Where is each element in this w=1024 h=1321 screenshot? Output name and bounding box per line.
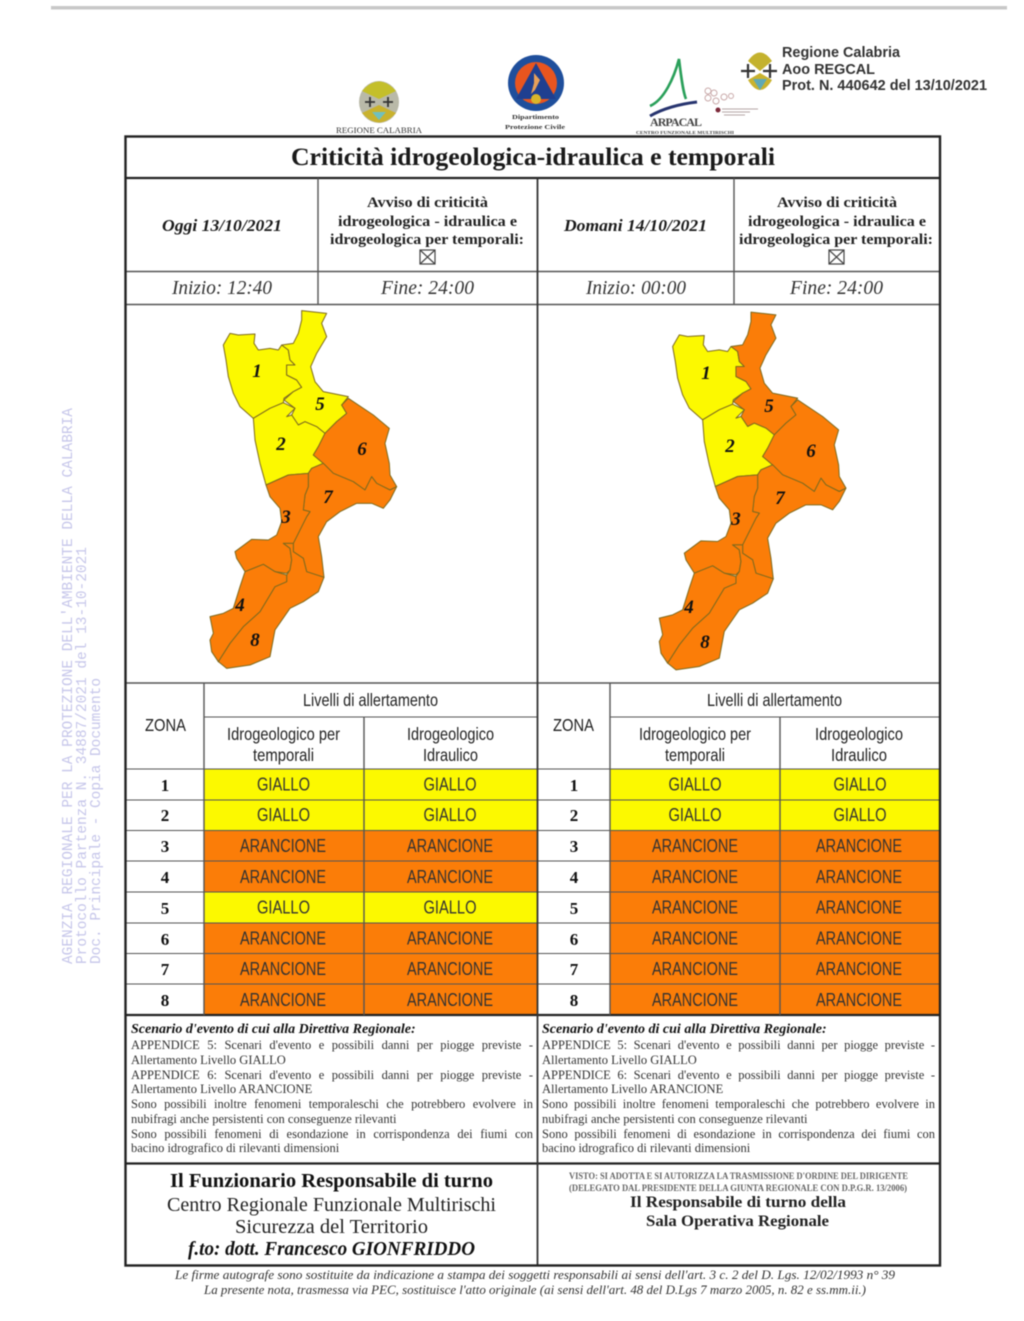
protocol text: Regione Calabria bbox=[782, 45, 901, 61]
map labels: tomorrow: 6 bbox=[806, 441, 816, 462]
logo: protocol stamp crest bbox=[741, 52, 777, 90]
header: today: Oggi 13/10/2021 bbox=[162, 216, 282, 235]
table headings: right: Idraulico bbox=[831, 745, 887, 765]
protocol text: Prot. N. 440642 del 13/10/2021 bbox=[782, 78, 987, 94]
signature: left bbox=[167, 1170, 496, 1260]
footer note bbox=[174, 1267, 896, 1297]
alert levels: left table: ARANCIONE bbox=[240, 928, 326, 948]
zone numbers: 5 bbox=[161, 899, 169, 918]
table headings: left: Idrogeologico per bbox=[227, 724, 340, 744]
scenario text: left: Sono possibili fenomeni di esondazione in corrispondenza dei fiumi con bbox=[131, 1126, 533, 1140]
logo: Dipartimento Protezione Civile: Protezione Civile bbox=[505, 124, 565, 131]
signature: left: f.to: dott. Francesco GIONFRIDDO bbox=[188, 1238, 475, 1260]
signature: right: (DELEGATO DAL PRESIDENTE DELLA GIUNTA REGIONALE CON D.P.G.R. 13/2006) bbox=[569, 1183, 907, 1194]
table headings: right: temporali bbox=[665, 745, 725, 765]
zone numbers: 2 bbox=[570, 806, 578, 825]
header: tomorrow: idrogeologica - idraulica e bbox=[748, 214, 927, 230]
zone numbers: 6 bbox=[161, 930, 169, 949]
header: today: Fine: 24:00 bbox=[380, 278, 474, 299]
logo: ARPACAL: ARPACAL bbox=[650, 115, 702, 129]
alert levels: left table: ARANCIONE bbox=[407, 990, 493, 1010]
signature: right: Il Responsabile di turno della bbox=[630, 1194, 846, 1211]
checkbox: tomorrow bbox=[829, 250, 844, 264]
map labels: today bbox=[234, 361, 367, 651]
scenario text: right: APPENDICE 6: Scenari d'evento e possibili danni per piogge previste - bbox=[542, 1068, 935, 1082]
map labels: tomorrow: 1 bbox=[701, 363, 711, 384]
map labels: tomorrow: 3 bbox=[730, 509, 741, 530]
alert levels: left table: ARANCIONE bbox=[240, 990, 326, 1010]
alert levels: left table: GIALLO bbox=[424, 805, 476, 825]
signature: left: Il Funzionario Responsabile di turno bbox=[170, 1170, 493, 1192]
signature: right bbox=[569, 1172, 908, 1230]
protocol text: Aoo REGCAL bbox=[782, 62, 875, 78]
alert levels: right table: GIALLO bbox=[834, 774, 886, 794]
table headings: left: temporali bbox=[253, 745, 314, 765]
map labels: today: 1 bbox=[252, 361, 262, 382]
alert level cells: right table bbox=[610, 769, 940, 1015]
alert levels: left table: ARANCIONE bbox=[407, 959, 493, 979]
scenario text: right bbox=[542, 1023, 935, 1161]
zone numbers bbox=[161, 776, 579, 1010]
map labels: tomorrow: 2 bbox=[724, 436, 735, 457]
table headings: right: Idrogeologico bbox=[815, 724, 903, 744]
alert levels: right table: ARANCIONE bbox=[816, 836, 902, 856]
logo: ARPACAL: CENTRO FUNZIONALE MULTIRISCHI bbox=[636, 130, 734, 135]
scenario text: right: Sono possibili inoltre fenomeni temporaleschi che potrebbero evolvere in bbox=[542, 1097, 935, 1111]
header: tomorrow: idrogeologica per temporali: bbox=[739, 232, 933, 248]
header: today: idrogeologica - idraulica e bbox=[338, 214, 518, 230]
alert levels: left table: ARANCIONE bbox=[240, 867, 326, 887]
logo: Regione Calabria: REGIONE CALABRIA bbox=[336, 126, 422, 135]
alert levels: right table: ARANCIONE bbox=[652, 928, 738, 948]
protocol text bbox=[782, 45, 987, 94]
alert levels: left table: GIALLO bbox=[257, 898, 310, 918]
logo: ARPACAL bbox=[636, 59, 758, 135]
zone numbers: 1 bbox=[570, 776, 578, 795]
zone numbers: 7 bbox=[570, 960, 579, 979]
map labels: tomorrow: 8 bbox=[700, 632, 710, 653]
alert levels: right table: GIALLO bbox=[668, 774, 722, 794]
alert levels: right table: ARANCIONE bbox=[652, 898, 738, 918]
map labels: tomorrow: 7 bbox=[775, 488, 786, 509]
side watermark: protocol stamp: Doc. Principale - Copia Documento bbox=[89, 678, 105, 964]
side watermark: protocol stamp: Protocollo Partenza N. 34887/2021 del 13-10-2021 bbox=[75, 547, 91, 964]
map labels: tomorrow: 5 bbox=[764, 396, 774, 417]
zone numbers: 3 bbox=[161, 837, 169, 856]
alert levels: left table: ARANCIONE bbox=[240, 836, 326, 856]
map labels: tomorrow bbox=[683, 363, 816, 653]
scenario text: right: Allertamento Livello ARANCIONE bbox=[542, 1082, 723, 1096]
side watermark: protocol stamp: AGENZIA REGIONALE PER LA PROTEZIONE DELL'AMBIENTE DELLA CALABRIA bbox=[61, 408, 77, 964]
header: today bbox=[162, 195, 524, 299]
checkbox: today bbox=[420, 250, 435, 264]
table headings: left: Idrogeologico bbox=[407, 724, 494, 744]
zone numbers: 7 bbox=[161, 960, 170, 979]
map labels: today: 2 bbox=[275, 434, 286, 455]
table grid bbox=[125, 136, 940, 1266]
zone numbers: 1 bbox=[161, 776, 169, 795]
map: Calabria tomorrow bbox=[659, 312, 846, 670]
map labels: today: 4 bbox=[234, 595, 245, 616]
table headings: left bbox=[145, 690, 494, 765]
scenario text: left: APPENDICE 5: Scenari d'evento e possibili danni per piogge previste - bbox=[131, 1038, 533, 1052]
map labels: today: 6 bbox=[357, 439, 367, 460]
alert levels: left table bbox=[240, 774, 493, 1010]
scenario text: right: APPENDICE 5: Scenari d'evento e possibili danni per piogge previste - bbox=[542, 1038, 935, 1052]
table headings: right: Livelli di allertamento bbox=[707, 690, 842, 710]
header: tomorrow: Domani 14/10/2021 bbox=[563, 216, 707, 235]
alert levels: right table: GIALLO bbox=[668, 805, 722, 825]
scenario text: left bbox=[131, 1023, 533, 1161]
alert levels: left table: ARANCIONE bbox=[407, 928, 493, 948]
signature: right: VISTO: SI ADOTTA E SI AUTORIZZA LA TRASMISSIONE D'ORDINE DEL DIRIGENTE bbox=[569, 1172, 908, 1182]
zone numbers: 6 bbox=[570, 930, 578, 949]
alert levels: left table: ARANCIONE bbox=[407, 867, 493, 887]
signature: right: Sala Operativa Regionale bbox=[646, 1213, 829, 1230]
title: Criticità idrogeologica-idraulica e temporali bbox=[291, 144, 775, 171]
alert levels: right table: ARANCIONE bbox=[816, 990, 902, 1010]
header: today: Avviso di criticità bbox=[367, 195, 489, 211]
alert levels: right table: ARANCIONE bbox=[816, 959, 902, 979]
table headings: right: ZONA bbox=[553, 715, 594, 735]
scenario text: right: bacino idrografico di rilevanti dimensioni bbox=[542, 1141, 750, 1155]
scenario text: left: bacino idrografico di rilevanti dimensioni bbox=[131, 1141, 339, 1155]
header: tomorrow: Inizio: 00:00 bbox=[585, 278, 686, 299]
scenario text: left: APPENDICE 6: Scenari d'evento e possibili danni per piogge previste - bbox=[131, 1068, 533, 1082]
alert levels: right table: GIALLO bbox=[834, 805, 886, 825]
header: tomorrow: Avviso di criticità bbox=[777, 195, 898, 211]
logo: Dipartimento Protezione Civile bbox=[505, 55, 565, 131]
map labels: today: 8 bbox=[250, 630, 260, 651]
header: tomorrow bbox=[563, 195, 933, 299]
map labels: today: 7 bbox=[323, 487, 334, 508]
map: Calabria today bbox=[210, 311, 397, 668]
alert levels: left table: ARANCIONE bbox=[407, 836, 493, 856]
footer note: La presente nota, trasmessa via PEC, sostituisce l'atto originale (ai sensi dell'art. 48 del D.Lgs 7 marzo 2005, n. 82 e ss.mm.ii.) bbox=[203, 1282, 866, 1297]
alert levels: left table: ARANCIONE bbox=[240, 959, 326, 979]
scenario text: right: nubifragi anche persistenti con conseguenze rilevanti bbox=[542, 1112, 808, 1126]
table headings: left: ZONA bbox=[145, 715, 186, 735]
zone numbers: 8 bbox=[161, 991, 169, 1010]
alert levels: right table: ARANCIONE bbox=[652, 959, 738, 979]
map labels: today: 5 bbox=[315, 394, 325, 415]
zone numbers: 5 bbox=[570, 899, 578, 918]
zone numbers: 4 bbox=[570, 868, 579, 887]
alert levels: right table: ARANCIONE bbox=[816, 898, 902, 918]
signature: left: Sicurezza del Territorio bbox=[235, 1216, 428, 1238]
alert levels: right table: ARANCIONE bbox=[652, 836, 738, 856]
map labels: tomorrow: 4 bbox=[683, 597, 694, 618]
alert levels: right table: ARANCIONE bbox=[816, 867, 902, 887]
alert levels: right table bbox=[652, 774, 902, 1010]
side watermark: protocol stamp bbox=[61, 408, 105, 964]
alert levels: left table: GIALLO bbox=[424, 774, 476, 794]
scenario text: left: nubifragi anche persistenti con conseguenze rilevanti bbox=[131, 1112, 397, 1126]
zone numbers: 4 bbox=[161, 868, 170, 887]
table headings: left: Idraulico bbox=[423, 745, 478, 765]
scenario text: left: Sono possibili inoltre fenomeni temporaleschi che potrebbero evolvere in bbox=[131, 1097, 533, 1111]
map labels: today: 3 bbox=[280, 507, 291, 528]
alert level cells: left table bbox=[204, 769, 537, 1015]
scenario text: right: Allertamento Livello GIALLO bbox=[542, 1053, 697, 1067]
logo: Dipartimento Protezione Civile: Dipartimento bbox=[512, 114, 559, 121]
zone numbers: 3 bbox=[570, 837, 578, 856]
table headings: right: Idrogeologico per bbox=[639, 724, 751, 744]
alert levels: left table: GIALLO bbox=[257, 805, 310, 825]
alert levels: left table: GIALLO bbox=[424, 898, 476, 918]
header: today: Inizio: 12:40 bbox=[171, 278, 272, 299]
alert levels: left table: GIALLO bbox=[257, 774, 310, 794]
scenario text: right: Sono possibili fenomeni di esondazione in corrispondenza dei fiumi con bbox=[542, 1126, 935, 1140]
zone numbers: 8 bbox=[570, 991, 578, 1010]
alert levels: right table: ARANCIONE bbox=[652, 867, 738, 887]
logo: Regione Calabria bbox=[336, 81, 422, 135]
header: tomorrow: Fine: 24:00 bbox=[789, 278, 883, 299]
alert levels: right table: ARANCIONE bbox=[652, 990, 738, 1010]
zone numbers: 2 bbox=[161, 806, 169, 825]
footer note: Le firme autografe sono sostituite da indicazione a stampa dei soggetti responsabili ai sensi dell'art. 3 c. 2 del D. Lgs. 12/02/1993 n° 39 bbox=[174, 1267, 896, 1282]
signature: left: Centro Regionale Funzionale Multirischi bbox=[167, 1194, 496, 1216]
scenario text: left: Allertamento Livello ARANCIONE bbox=[131, 1082, 312, 1096]
alert levels: right table: ARANCIONE bbox=[816, 928, 902, 948]
scenario text: left: Allertamento Livello GIALLO bbox=[131, 1053, 286, 1067]
table headings: left: Livelli di allertamento bbox=[303, 690, 438, 710]
table headings: right bbox=[553, 690, 903, 765]
header: today: idrogeologica per temporali: bbox=[330, 232, 524, 248]
